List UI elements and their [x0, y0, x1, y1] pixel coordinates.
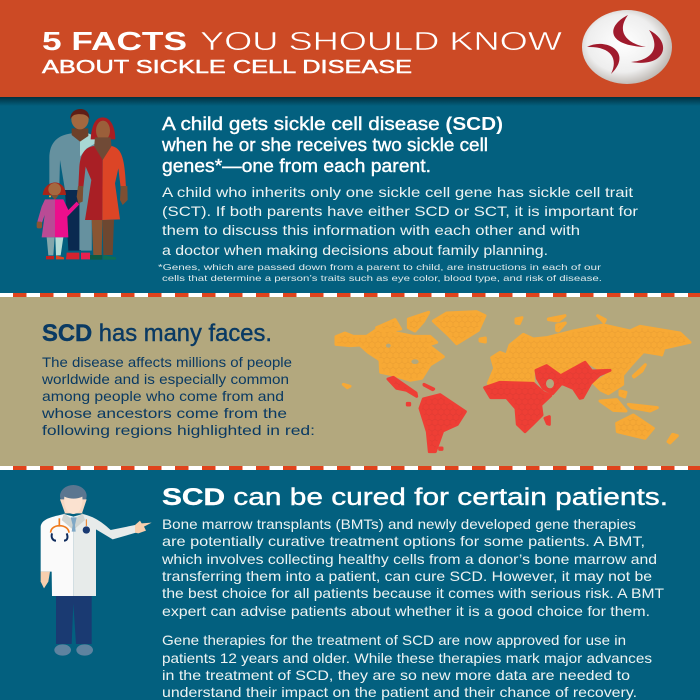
- map gaps: inland seas: [386, 344, 554, 388]
- text block: gene therapies: in the treatment of SCD, they are so new more data are needed to: [162, 667, 630, 683]
- text block: bone marrow transplants: which involves collecting healthy cells from a donor’s bone marrow and: [161, 551, 657, 567]
- text block: [162, 184, 638, 258]
- text block: gene therapies: [162, 632, 652, 700]
- heading: when he or she receives two sickle cell: [161, 134, 488, 155]
- heading: SCD has many faces.: [42, 320, 272, 347]
- text block: gene therapies: understand their impact on the patient and their chance of recovery.: [162, 684, 637, 700]
- text block: [41, 354, 315, 438]
- text block: among people who come from and: [42, 388, 284, 404]
- title: ABOUT SICKLE CELL DISEASE: [42, 56, 412, 77]
- unaffected regions: [336, 312, 690, 443]
- text block: bone marrow transplants: are potentially curative treatment options for some patients. A BMT,: [162, 533, 645, 549]
- heading: A child gets sickle cell disease (SCD): [162, 113, 503, 134]
- heading: genes*—one from each parent.: [162, 155, 431, 176]
- affected regions: [388, 362, 610, 452]
- icon: sickle cell logo: [582, 10, 672, 84]
- panel: cure section: [41, 484, 668, 700]
- text block: bone marrow transplants: expert can advise patients about whether it is a good choice for them.: [162, 603, 650, 619]
- footnote: cells that determine a person’s traits such as eye color, blood type, and risk of disease.: [162, 273, 602, 283]
- icon: family: [37, 109, 128, 260]
- text block: worldwide and is especially common: [41, 371, 289, 387]
- panel: genetics fact: [37, 109, 638, 283]
- text block: A child who inherits only one sickle cell gene has sickle cell trait: [162, 184, 633, 200]
- title: [42, 26, 563, 77]
- text block: them to discuss this information with each other and with: [162, 222, 580, 238]
- text block: gene therapies: patients 12 years and older. While these therapies mark major advances: [162, 650, 652, 666]
- footnote: *Genes, which are passed down from a parent to child, are instructions in each of our: [158, 262, 601, 272]
- text block: a doctor when making decisions about family planning.: [162, 242, 548, 258]
- heading: [161, 113, 503, 176]
- text block: The disease affects millions of people: [42, 354, 292, 370]
- text block: bone marrow transplants: the best choice for all patients because it comes with serious risk. A BMT: [162, 585, 664, 601]
- text block: gene therapies: Gene therapies for the treatment of SCD are now approved for use in: [162, 632, 626, 648]
- text block: whose ancestors come from the: [41, 405, 287, 421]
- text block: following regions highlighted in red:: [42, 422, 315, 438]
- icon: doctor: [41, 485, 152, 656]
- text block: (SCT). If both parents have either SCD or SCT, it is important for: [162, 203, 638, 219]
- heading: SCD can be cured for certain patients.: [162, 484, 668, 511]
- panel: global map section: [0, 293, 700, 470]
- text block: bone marrow transplants: [161, 516, 664, 619]
- footnote: [158, 262, 602, 283]
- text block: bone marrow transplants: Bone marrow transplants (BMTs) and newly developed gene therapies: [162, 516, 636, 532]
- chart: world map: [336, 312, 690, 452]
- title: YOU SHOULD KNOW: [200, 26, 563, 56]
- text block: bone marrow transplants: transferring them into a patient, can cure SCD. However, it may not be: [162, 568, 652, 584]
- panel: header banner: [0, 0, 700, 106]
- title: 5 FACTS: [42, 26, 187, 56]
